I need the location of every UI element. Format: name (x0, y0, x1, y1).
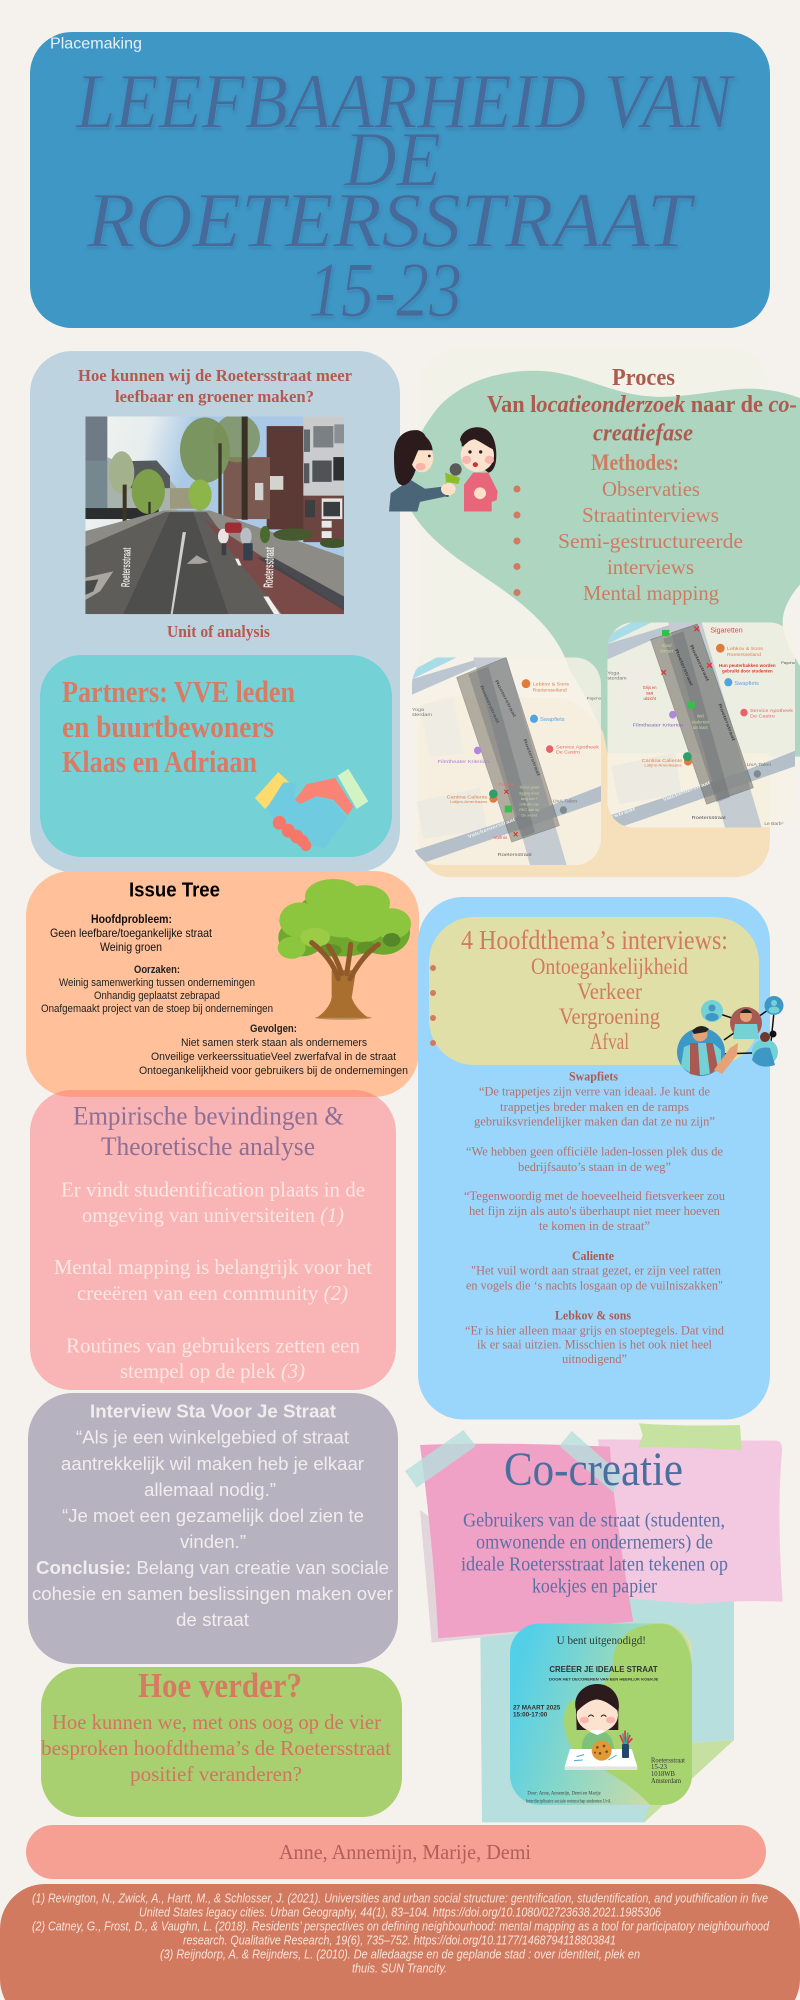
text: gevolgen: Ontoegankelijkheid voor gebruikers bij de ondernemingen (139, 1065, 408, 1077)
text: oorzaken: Oorzaken: (134, 964, 180, 976)
map: annotated map two: Sigaretten (710, 628, 743, 635)
map: annotated map one: Valckenierstraat (467, 817, 517, 840)
list: methodes: interviews (607, 555, 694, 579)
invitation card: DOOR HET DECOREREN VAN EEN HEERLIJK KOEKJE (549, 1676, 659, 1681)
map: annotated map one: De Castro (556, 749, 580, 756)
map: annotated map two (606, 622, 795, 832)
text: hoofdprobleem: Geen leefbare/toegankelijke straat (50, 926, 213, 940)
map: annotated map two: Roetersstraat (692, 815, 727, 820)
text: interview quotes: “Er is hier alleen maar grijs en stoeptegels. Dat vind (465, 1323, 724, 1338)
map: annotated map one: Terras goeie (519, 785, 539, 789)
text: interview quotes: "Het vuil wordt aan straat gezet, er zijn veel ratten (471, 1263, 721, 1278)
text: oorzaken: Onhandig geplaatst zebrapad (94, 990, 220, 1002)
text: findings: stempel op de plek (3) (120, 1359, 305, 1383)
text: co-creatie description: omwonende en ondernemers) de (476, 1532, 713, 1554)
list: methodes (514, 450, 743, 605)
text: findings: creeëren van een community (2) (77, 1281, 348, 1305)
panel: proces (389, 347, 800, 877)
map: annotated map one: ligging mooi (520, 791, 539, 796)
text: co-creatie description: Gebruikers van de straat (studenten, (463, 1510, 725, 1532)
map: annotated map two: Lebkov & Sons (727, 646, 764, 652)
map: annotated map one: ✕ (503, 787, 509, 797)
text: gevolgen: Niet samen sterk staan als ondernemers (181, 1037, 367, 1049)
heading: partners: Klaas en Adriaan (62, 744, 257, 779)
panel: hoe verder (41, 1666, 402, 1817)
map: annotated map two: Roeterstraat (717, 703, 737, 742)
heading: title lines: 15-23 (308, 246, 462, 333)
photo: Roetersstraat street view (85, 414, 347, 614)
heading: research question: Hoe kunnen wij de Roetersstraat meer (78, 366, 352, 385)
heading: empirische bevindingen: Theoretische analyse (101, 1132, 315, 1161)
invitation card: Interdisciplinaire sociale wetenschap studenten UvA (526, 1799, 611, 1805)
map: annotated map two: Yoga (607, 671, 620, 676)
text: interview quotes: “We hebben geen officiële laden-lossen plek dus de (466, 1144, 723, 1159)
text: interview quotes (464, 1069, 725, 1366)
map: annotated map two: Latijns-Amerikaans (644, 763, 682, 767)
map: annotated map one: reflectie van (519, 803, 539, 807)
map: annotated map two: ✕ (660, 668, 667, 677)
invitation card: Amsterdam (651, 1776, 681, 1785)
heading: proces: creatiefase (593, 420, 693, 446)
text: interview quotes: Swapfiets (569, 1069, 618, 1084)
text: hoofdprobleem (50, 912, 213, 954)
heading: hoe verder: Hoe verder? (138, 1666, 302, 1705)
text: interview quotes: te komen in de straat” (539, 1218, 650, 1233)
text: hoe verder question: besproken hoofdthema’s de Roetersstraat (41, 1736, 391, 1760)
map: annotated map one: UvA Talen (553, 798, 578, 804)
invitation card: Door: Anne, Annemijn, Demi en Marije (527, 1790, 601, 1796)
heading: proces (487, 365, 797, 446)
banner: authors: Anne, Annemijn, Marije, Demi (279, 1840, 531, 1864)
panel: references: thuis. SUN Trancity. (352, 1961, 447, 1976)
invitation card: 27 MAART 2025 (513, 1706, 561, 1712)
text: co-creatie description (461, 1510, 728, 1598)
caption: unit of analysis: Unit of analysis (167, 622, 270, 641)
map: annotated map one: Latijns-Amerikaans (450, 800, 488, 804)
text: findings: Er vindt studentification plaats in de (61, 1177, 365, 1201)
map: annotated map two: als klant (693, 725, 708, 730)
map: annotated map two: studenten (692, 719, 709, 724)
label: Placemaking: Placemaking (50, 36, 142, 53)
heading: partners (62, 674, 295, 779)
map: annotated map one: Swapfiets (540, 717, 565, 723)
panel: references: United States legacy cities. Urban Geography, 44(1), 83–104. https://doi.org/10.1080/02723638.2021.1985306 (139, 1905, 662, 1920)
panel: interview sta voor je straat: vinden.” (180, 1532, 246, 1552)
text: oorzaken: Weinig samenwerking tussen ondernemingen (59, 977, 255, 989)
map: annotated map two: UvA Talen (747, 762, 772, 768)
invitation card: CREËER JE IDEALE STRAAT (549, 1664, 658, 1674)
icon: handshake (255, 769, 368, 851)
panel: interview sta voor je straat: allemaal nodig.” (144, 1480, 276, 1500)
text: hoe verder question: Hoe kunnen we, met ons oog op de vier (52, 1710, 381, 1734)
icon: street interview illustration (389, 427, 498, 511)
panel: references (0, 1884, 800, 2000)
map: annotated map two: contact (660, 649, 674, 654)
map: annotated map one: De avond (522, 814, 537, 818)
map: annotated map one: Filmtheater Kriterion (438, 759, 489, 765)
text: interview quotes: Caliente (572, 1248, 614, 1263)
panel: partners (40, 655, 392, 857)
text: interview quotes: “Tegenwoordig met de hoeveelheid fietsverkeer zou (464, 1188, 725, 1203)
list: methodes: Methodes: (591, 450, 679, 475)
heading: issue tree: Issue Tree (129, 880, 220, 902)
panel: interview sta voor je straat: de straat (176, 1610, 249, 1630)
panel: hoofdthema's: Verkeer (577, 979, 642, 1004)
invitation card: U bent uitgenodigd! (557, 1633, 646, 1647)
heading: co-creatie: Co-creatie (504, 1443, 683, 1496)
panel: hoofdthema's: Vergroening (559, 1004, 660, 1029)
map: annotated map two: Paycho (781, 661, 795, 665)
map: annotated map one: sterdam (412, 712, 432, 717)
map: annotated map two: Swapfiets (734, 681, 759, 687)
map: annotated map two: Grijs en (643, 685, 657, 690)
text: hoofdprobleem: Weinig groen (100, 940, 162, 954)
text: findings: omgeving van universiteiten (1) (82, 1203, 344, 1227)
panel: interview sta voor je straat: cohesie en samen beslissingen maken over (32, 1584, 393, 1604)
map: annotated map one: Lebkov & Sons (533, 682, 570, 688)
panel: research question and partners (30, 351, 400, 872)
panel: empirische bevindingen (30, 1090, 396, 1390)
invitation card (510, 1623, 692, 1805)
map: annotated map one: Yoga (412, 707, 425, 712)
map: annotated map two: Roeterstraat (674, 648, 695, 687)
text: co-creatie description: koekjes en papier (532, 1576, 657, 1598)
map: annotated map one: Fietsen (498, 782, 513, 787)
text: hoe verder question (41, 1710, 391, 1786)
map: annotated map one: ✕ (513, 830, 519, 839)
panel: interview sta voor je straat (28, 1393, 398, 1664)
text: interview quotes: ik er saai uitzien. Misschien is het ook niet heel (477, 1337, 712, 1352)
text: interview quotes: Lebkov & sons (555, 1308, 631, 1322)
map: annotated map two: ✕ (706, 661, 713, 671)
panel: interview sta voor je straat: “Als je een winkelgebied of straat (76, 1428, 349, 1448)
list: methodes: Mental mapping (583, 581, 719, 605)
map: annotated map one: lang zon + (521, 797, 538, 801)
map: annotated map two: De Castro (750, 714, 775, 720)
heading: proces: Van locatieonderzoek naar de co- (487, 392, 797, 418)
heading: empirische bevindingen (73, 1102, 344, 1161)
map: annotated map two: Le Barbier (764, 821, 788, 826)
map: annotated map one: Roetersseiland (533, 688, 567, 694)
text: gevolgen (139, 1023, 408, 1077)
invitation card: 15:00-17:00 (513, 1713, 548, 1719)
heading: title lines: ROETERSSTRAAT (86, 177, 696, 264)
map: annotated map two: saai (646, 690, 653, 695)
text: oorzaken: Onafgemaakt project van de stoep bij ondernemingen (41, 1003, 273, 1015)
map: annotated map two: Roeterstraat (689, 644, 711, 683)
map: annotated map one (412, 657, 601, 867)
heading: partners: en buurtbewoners (62, 709, 274, 744)
heading: proces: Proces (612, 365, 675, 391)
heading: research question: leefbaar en groener maken? (115, 387, 314, 406)
map: annotated map one: Roeterstraat (479, 684, 501, 725)
map: annotated map one: Vuilnis (493, 835, 507, 840)
text: co-creatie description: ideale Roetersstraat laten tekenen op (461, 1554, 728, 1576)
map: annotated map one: Roeterstraat (522, 738, 542, 777)
list: methodes: Observaties (602, 477, 700, 501)
panel: hoofdthema's (429, 917, 759, 1065)
heading: title lines: LEEFBAARHEID VAN (75, 57, 736, 144)
panel: references: (3) Reijndorp, A. & Reijnders, L. (2010). De alledaagse en de geplande stad : over identiteit, plek en (160, 1947, 640, 1962)
map: annotated map one: Cantina Caliente (447, 795, 488, 801)
text: interview quotes: gebruiksvriendelijker maken dan dat ze nu zijn” (474, 1114, 715, 1128)
panel: references: research. Qualitative Research, 19(6), 735–752. https://doi.org/10.1177/1468794118803841 (183, 1933, 616, 1948)
icon: tree (278, 879, 411, 1020)
panel: interviews (418, 897, 784, 1420)
text: interview quotes: bedrijfsauto’s staan in de weg” (518, 1159, 671, 1174)
text: interview quotes: en vogels die ‘s nachts losgaan op de vuilniszakken" (466, 1278, 723, 1293)
map: annotated map two: Service Apotheek (750, 708, 794, 714)
text: oorzaken (41, 964, 273, 1015)
text: gevolgen: Onveilige verkeerssituatieVeel zwerfafval in de straat (151, 1051, 396, 1063)
panel: interview sta voor je straat: Interview Sta Voor Je Straat (90, 1402, 336, 1422)
decorative paper notes and tape (405, 1423, 783, 1822)
text: hoe verder question: positief veranderen? (130, 1762, 302, 1786)
text: findings: Mental mapping is belangrijk voor het (54, 1255, 372, 1279)
panel: hoofdthema's: 4 Hoofdthema’s interviews: (461, 925, 728, 955)
icon: girl decorating cookie (565, 1684, 637, 1770)
decorative green blob and tan backdrop (406, 371, 800, 877)
map: annotated map two: Cantina Caliente (642, 758, 683, 764)
photo: Roetersstraat street view: Roetersstraat (261, 547, 277, 588)
heading: research question (78, 366, 352, 406)
text: interview quotes: “De trappetjes zijn verre van ideaal. Je kunt de (479, 1084, 710, 1099)
heading: partners: Partners: VVE leden (62, 674, 295, 709)
heading: empirische bevindingen: Empirische bevindingen & (73, 1102, 344, 1130)
map: annotated map two: Wel (697, 714, 704, 719)
text: interview quotes: uitnodigend” (562, 1351, 627, 1366)
map: annotated map two: Hun peuterbakken worden (719, 663, 776, 668)
panel: interview sta voor je straat: “Je moet een gezamelijk doel zien te (62, 1506, 364, 1526)
map: annotated map one: Paycho (587, 696, 601, 701)
panel: issue tree (26, 871, 419, 1097)
text: interview quotes: het fijn zijn als auto's überhaupt niet meer hoeven (469, 1203, 720, 1218)
panel: co-creatie (405, 1423, 783, 1822)
panel: interview sta voor je straat: Conclusie: Belang van creatie van sociale (36, 1558, 389, 1578)
map: annotated map two: Filmtheater Kriterion (633, 723, 684, 729)
map: annotated map two: Roetersseiland (727, 652, 761, 658)
map: annotated map one: Service Apotheek (556, 744, 600, 750)
heading: title lines (75, 57, 736, 333)
map: annotated map one: Roeterstraat (494, 679, 518, 719)
list: methodes: Straatinterviews (582, 503, 719, 527)
invitation card: 15-23 (651, 1762, 667, 1771)
icon: people network (677, 996, 784, 1076)
text: gevolgen: Gevolgen: (250, 1023, 297, 1035)
panel: hoofdthema's: Ontoegankelijkheid (531, 954, 688, 979)
banner: authors (26, 1825, 766, 1879)
text: findings: Routines van gebruikers zetten een (66, 1333, 360, 1357)
map: annotated map two: Valckenierstraat (662, 780, 712, 803)
heading: title lines: DE (343, 116, 441, 203)
map: annotated map one: Roetersstraat (498, 852, 533, 857)
map: annotated map two: Goed (662, 643, 672, 648)
map: annotated map two: ✕ (693, 625, 700, 634)
text: findings (54, 1177, 372, 1383)
list: methodes: Semi-gestructureerde (558, 529, 743, 553)
invitation card: 1018WB (651, 1769, 675, 1778)
panel: interview sta voor je straat: aantrekkelijk wil maken heb je elkaar (61, 1454, 364, 1474)
map: annotated map two: uitzicht (643, 696, 657, 701)
panel: title (30, 32, 770, 333)
map: annotated map two: gebruikt door studenten (722, 669, 773, 674)
map: annotated map two: sterdam (607, 675, 627, 681)
text: hoofdprobleem: Hoofdprobleem: (91, 912, 172, 926)
invitation card: Roetersstraat (651, 1755, 685, 1764)
text: interview quotes: trappetjes breder maken en de ramps (500, 1099, 689, 1114)
map: annotated map one: REC dan op (519, 808, 539, 812)
photo: Roetersstraat street view: Roetersstraat (119, 547, 134, 587)
map: annotated map two: erstraat (606, 806, 637, 822)
panel: hoofdthema's: Afval (590, 1029, 629, 1054)
